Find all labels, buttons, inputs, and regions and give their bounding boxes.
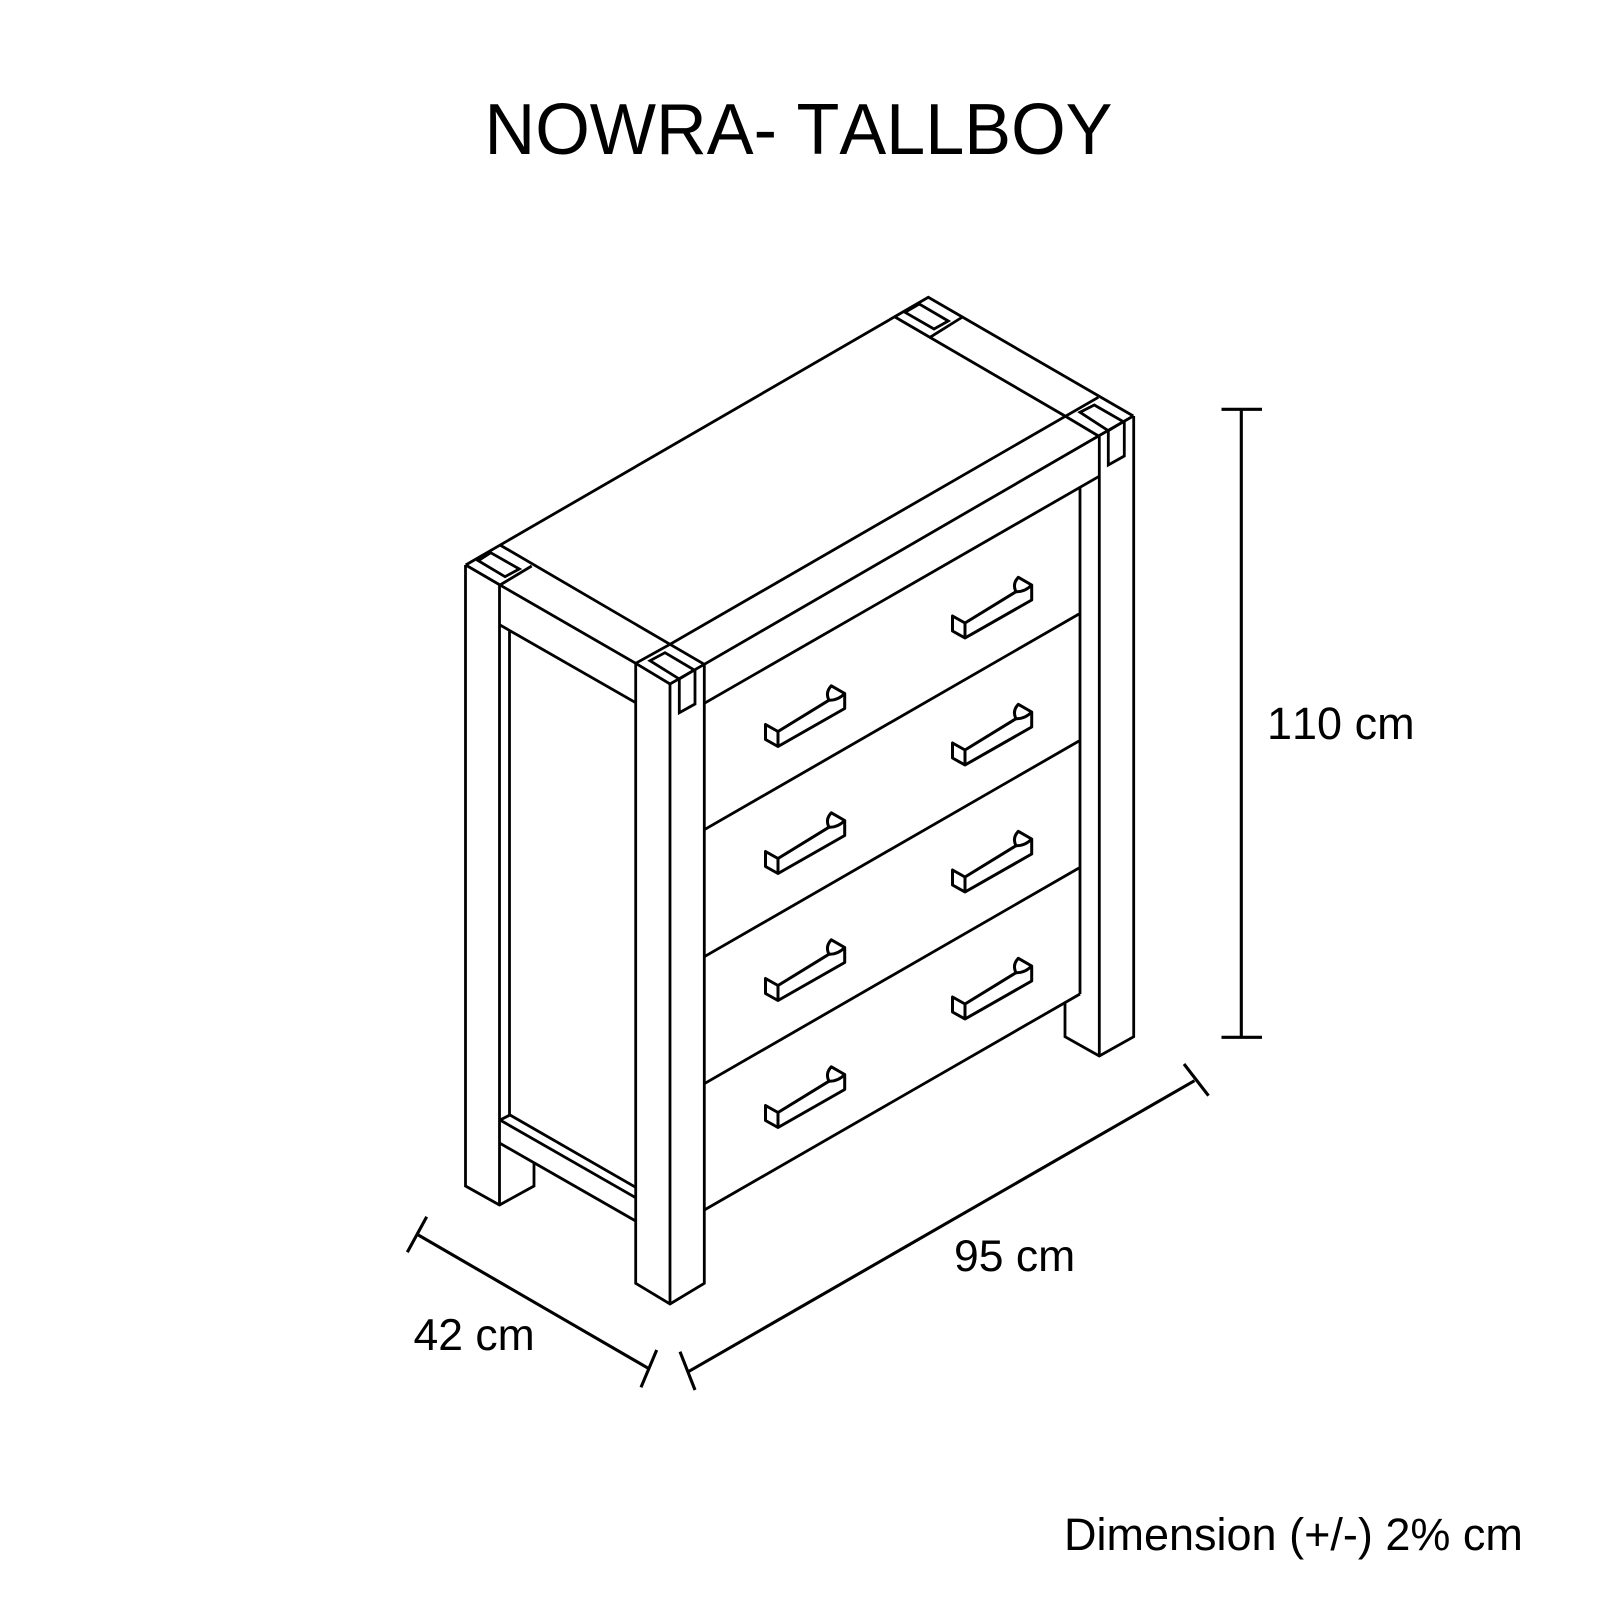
tallboy line drawing xyxy=(466,297,1134,1304)
footnote: dimension tolerance: Dimension (+/-) 2% cm xyxy=(1064,1509,1523,1560)
handle 1 right xyxy=(952,577,1032,638)
label: depth: 42 cm xyxy=(414,1311,535,1360)
drawer fronts xyxy=(704,477,1098,1210)
drawer handles xyxy=(766,577,1032,1128)
left back post xyxy=(466,565,534,1205)
handle 3 right xyxy=(952,831,1032,892)
dimension line: height xyxy=(1222,409,1262,1037)
front post xyxy=(636,663,704,1304)
side panel rails xyxy=(500,625,636,1221)
table top xyxy=(466,297,1133,684)
label: height: 110 cm xyxy=(1267,698,1415,749)
right post xyxy=(1065,416,1134,1056)
handle 2 left xyxy=(766,813,845,874)
dimension line: depth xyxy=(407,1217,657,1387)
dimension line: width xyxy=(680,1064,1208,1390)
handle 4 right xyxy=(952,958,1032,1019)
label: width: 95 cm xyxy=(954,1232,1075,1281)
handle 1 left xyxy=(766,686,845,746)
handle 3 left xyxy=(766,940,845,1000)
title: NOWRA- TALLBOY xyxy=(484,90,1112,170)
handle 2 right xyxy=(952,704,1032,765)
handle 4 left xyxy=(766,1067,845,1128)
top joint slots xyxy=(478,304,1124,713)
